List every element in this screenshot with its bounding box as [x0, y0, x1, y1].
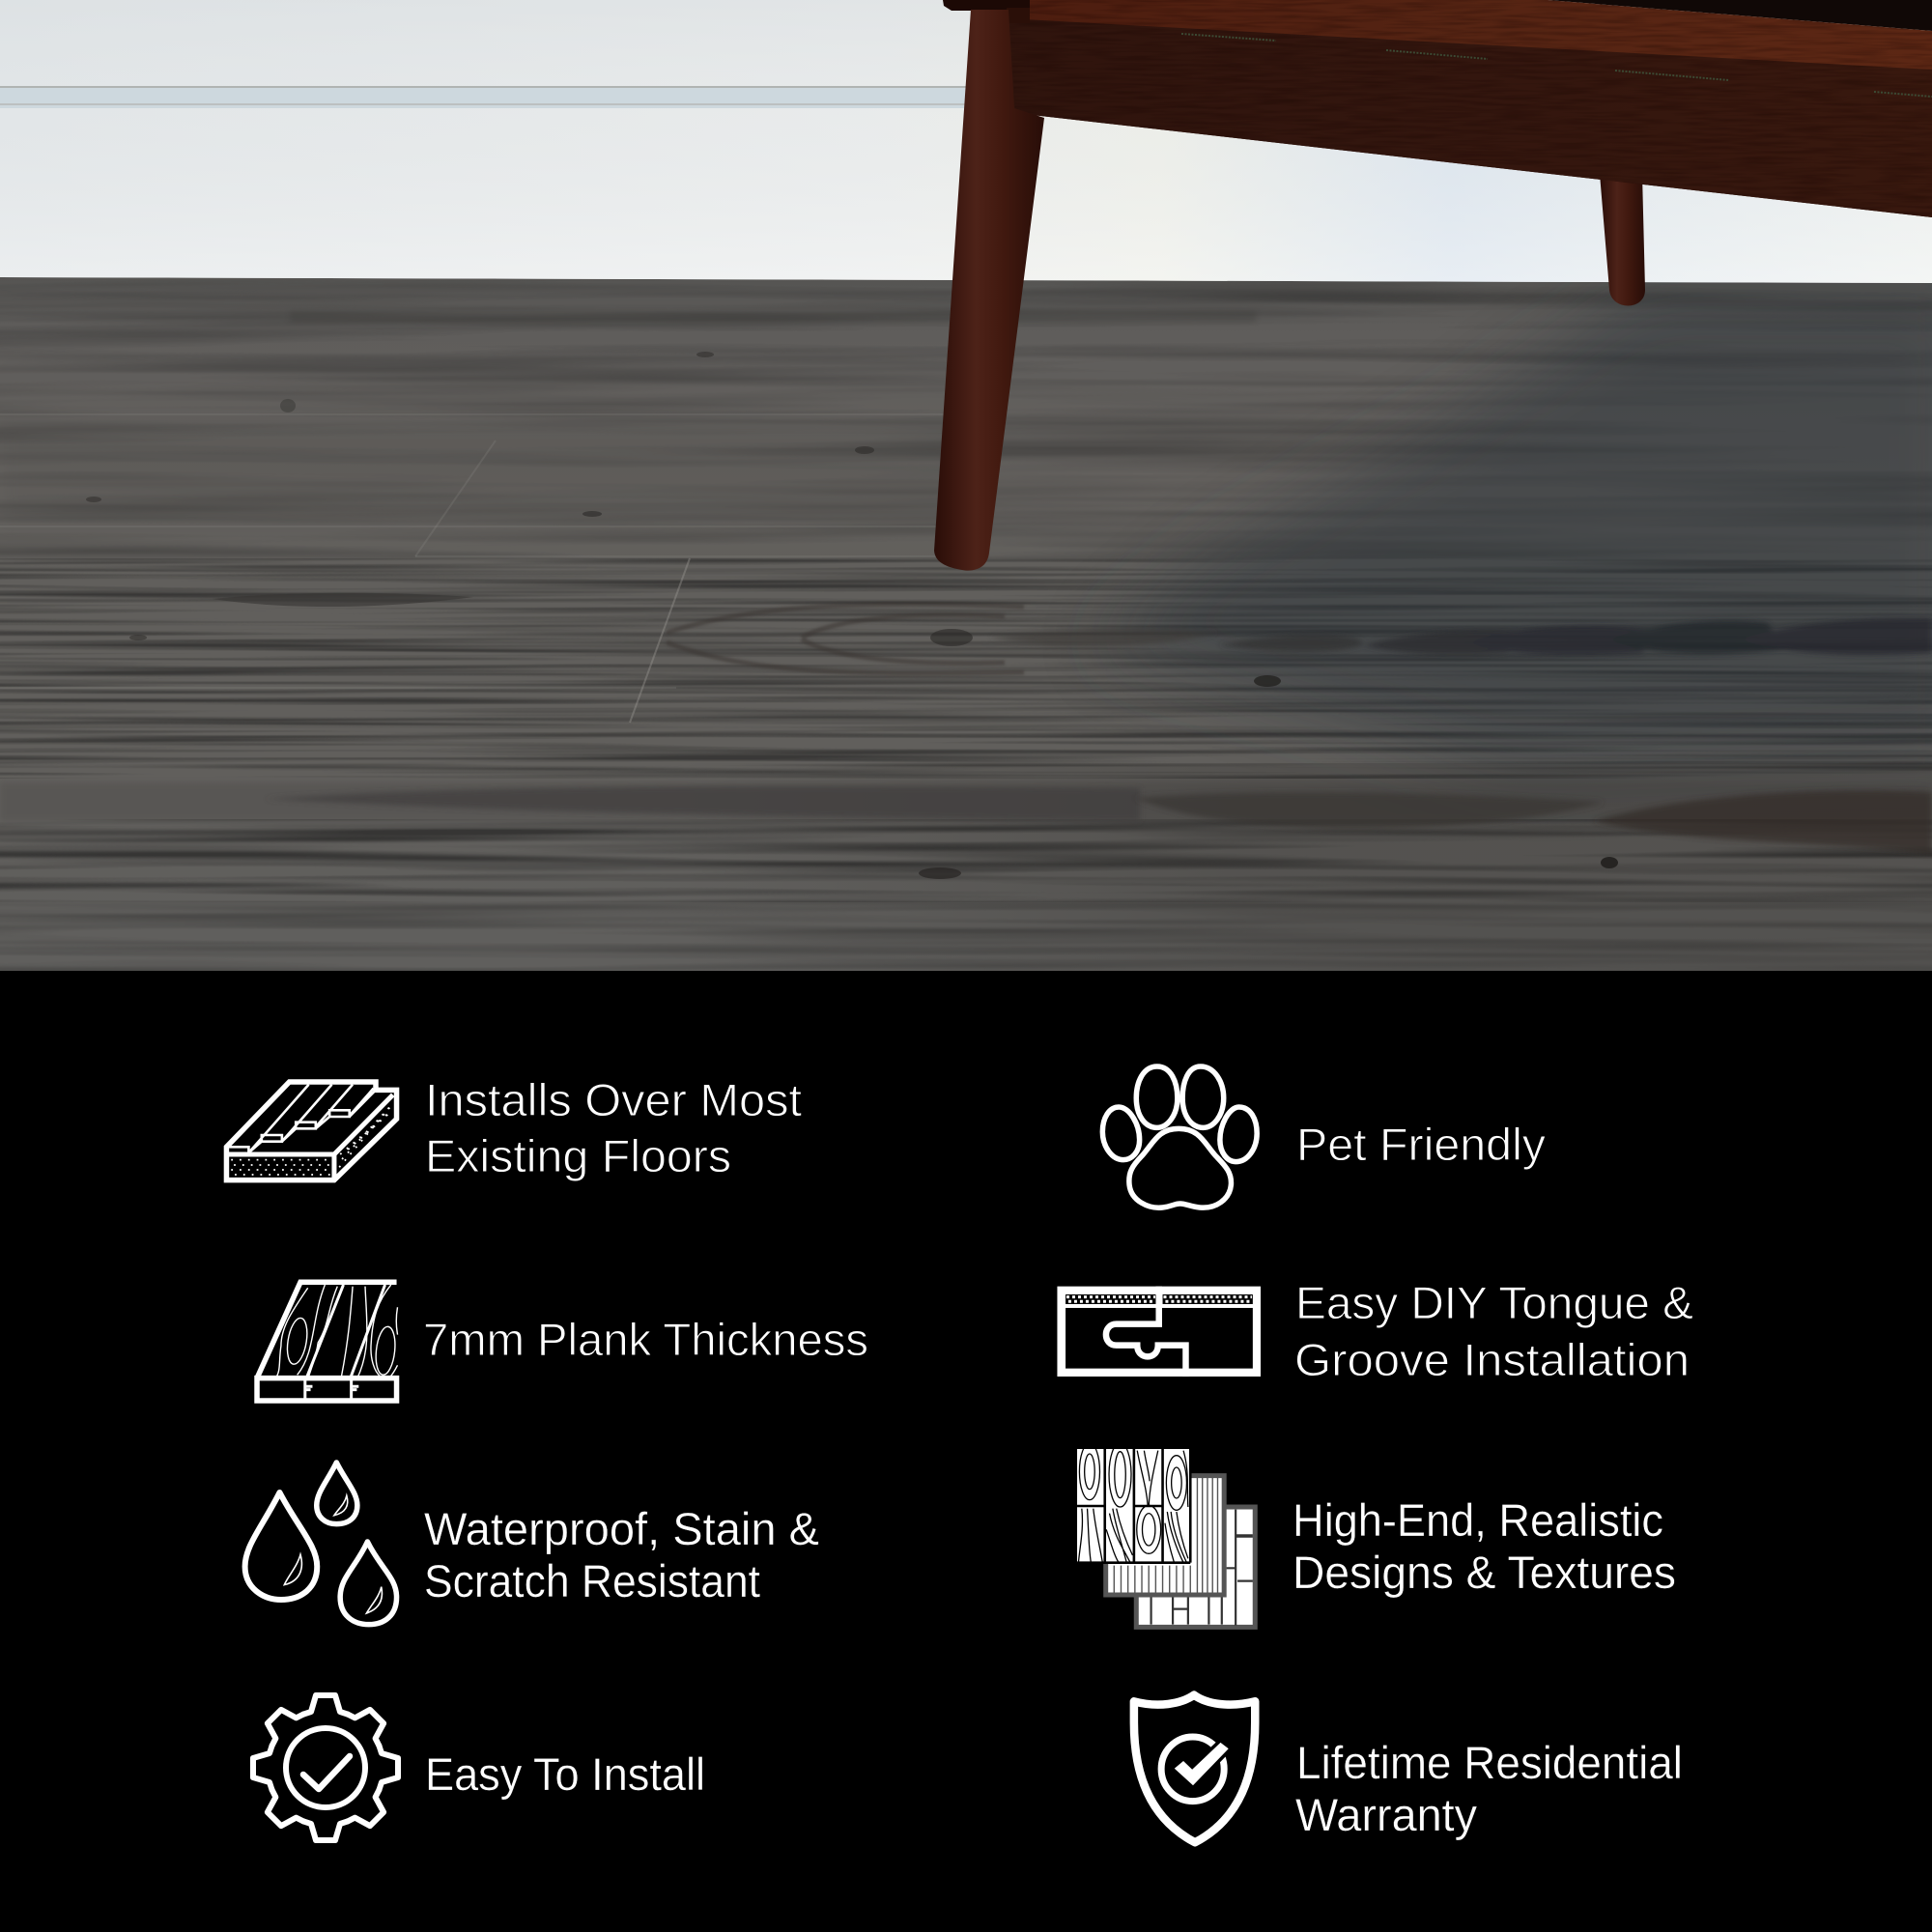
wall trim moulding	[0, 86, 966, 108]
label: easy DIY tongue and groove installation: Easy DIY Tongue &	[1295, 1277, 1693, 1328]
icon: paw print	[1102, 1066, 1257, 1208]
panel: black feature area	[224, 1064, 1693, 1847]
label: lifetime residential warranty: Warranty	[1295, 1789, 1477, 1840]
label: waterproof, stain and scratch resistant: Waterproof, Stain &	[424, 1503, 819, 1554]
feature: lifetime residential warranty	[1134, 1695, 1683, 1842]
furniture: stitch marks	[1181, 34, 1932, 97]
feature: high-end realistic designs and textures	[1077, 1442, 1676, 1627]
wood floor	[0, 277, 1932, 976]
panel: flooring photograph	[0, 0, 1932, 971]
label: high-end realistic designs and textures: High-End, Realistic	[1293, 1494, 1663, 1546]
furniture: front leg	[934, 10, 1044, 571]
label: easy DIY tongue and groove installation: Groove Installation	[1294, 1334, 1690, 1385]
soft dark bands	[1123, 319, 1252, 320]
feature: installs over most existing floors	[226, 1074, 802, 1181]
icon: floor cross section	[226, 1082, 397, 1180]
label: 7mm plank thickness: 7mm Plank Thickness	[423, 1314, 868, 1365]
furniture: seat black top	[1548, 0, 1932, 31]
label: installs over most existing floors: Installs Over Most	[425, 1074, 802, 1125]
label: easy DIY tongue and groove installation	[1294, 1277, 1693, 1385]
shadow of furniture	[1092, 290, 1932, 773]
icon: gear with check	[253, 1695, 398, 1840]
furniture: top board	[943, 0, 1932, 72]
icon: shield with check	[1134, 1695, 1255, 1842]
label: easy to install: Easy To Install	[425, 1748, 705, 1800]
feature: easy to install	[253, 1695, 705, 1840]
icon: wood plank	[257, 1282, 397, 1401]
feature: 7mm plank thickness	[257, 1282, 868, 1401]
knots	[86, 352, 1618, 879]
centre cathedral rings	[667, 604, 1024, 673]
label: lifetime residential warranty	[1295, 1737, 1683, 1840]
icon: stacked texture swatches	[1077, 1442, 1255, 1627]
label: waterproof, stain and scratch resistant: Scratch Resistant	[424, 1555, 760, 1606]
label: installs over most existing floors	[425, 1074, 802, 1181]
feature: waterproof, stain and scratch resistant	[245, 1463, 819, 1625]
label: high-end realistic designs and textures	[1293, 1494, 1676, 1598]
label: high-end realistic designs and textures: Designs & Textures	[1293, 1547, 1676, 1598]
furniture: back leg	[1600, 174, 1645, 305]
icon: water drops	[245, 1463, 397, 1625]
feature: pet friendly	[1102, 1066, 1546, 1208]
wall	[0, 0, 1932, 286]
icon: tongue and groove joint	[1057, 1287, 1261, 1377]
feature: easy DIY tongue and groove installation	[1057, 1277, 1693, 1385]
label: pet friendly: Pet Friendly	[1296, 1119, 1546, 1170]
label: installs over most existing floors: Existing Floors	[425, 1130, 731, 1181]
pale seams	[0, 414, 966, 688]
dark cathedral grain lenses	[265, 786, 1140, 821]
label: waterproof, stain and scratch resistant	[424, 1503, 819, 1606]
furniture: apron rail	[1009, 19, 1932, 217]
label: lifetime residential warranty: Lifetime Residential	[1296, 1737, 1683, 1788]
